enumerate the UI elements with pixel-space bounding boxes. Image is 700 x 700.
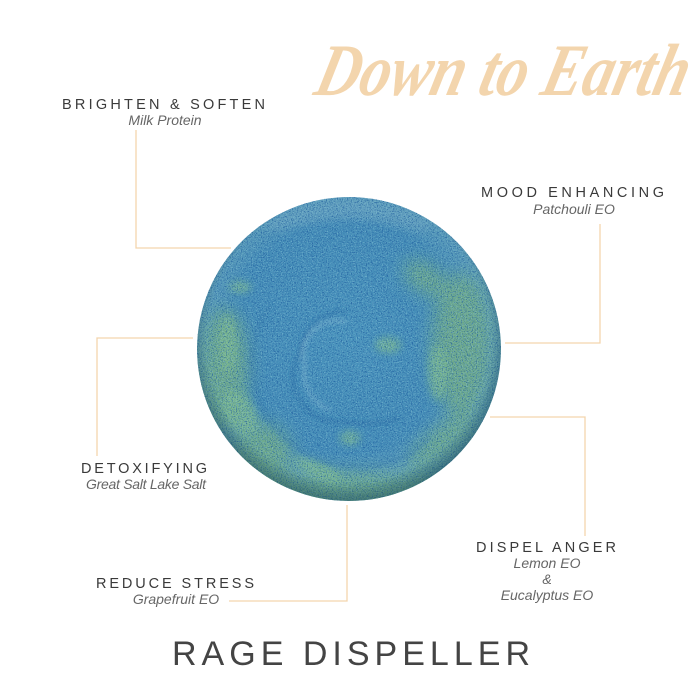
label: Brighten and Soften [62, 97, 265, 128]
label: Dispel Anger: & [542, 571, 552, 587]
connector lines [97, 130, 600, 601]
label: Reduce Stress [96, 576, 254, 607]
label: Detoxifying [81, 461, 207, 492]
pale top rim [268, 200, 429, 232]
label: Brighten and Soften: BRIGHTEN & SOFTEN [62, 97, 265, 113]
label: Mood Enhancing: MOOD ENHANCING [481, 185, 664, 201]
connector: Detoxifying [97, 338, 193, 456]
label: Dispel Anger: Eucalyptus EO [501, 587, 593, 603]
green swirl patches [200, 253, 492, 508]
product name: RAGE DISPELLER [172, 635, 530, 673]
label: Dispel Anger: DISPEL ANGER [476, 540, 616, 556]
bath bomb [197, 197, 501, 508]
label: Reduce Stress: Grapefruit EO [133, 591, 219, 607]
label: Dispel Anger [476, 540, 616, 603]
label: Reduce Stress: REDUCE STRESS [96, 576, 254, 592]
label: Detoxifying: DETOXIFYING [81, 461, 207, 477]
label: Dispel Anger: Lemon EO [514, 555, 581, 571]
connector: Dispel Anger [490, 417, 585, 536]
label: Mood Enhancing: Patchouli EO [533, 201, 615, 217]
embossed ring details [252, 305, 430, 466]
connector: Brighten and Soften [136, 130, 231, 248]
connector: Reduce Stress [229, 505, 347, 601]
speckled texture [197, 197, 501, 501]
label: Detoxifying: Great Salt Lake Salt [86, 476, 207, 492]
connector: Mood Enhancing [505, 224, 600, 343]
label: Mood Enhancing [481, 185, 664, 217]
label: Brighten and Soften: Milk Protein [128, 112, 202, 128]
